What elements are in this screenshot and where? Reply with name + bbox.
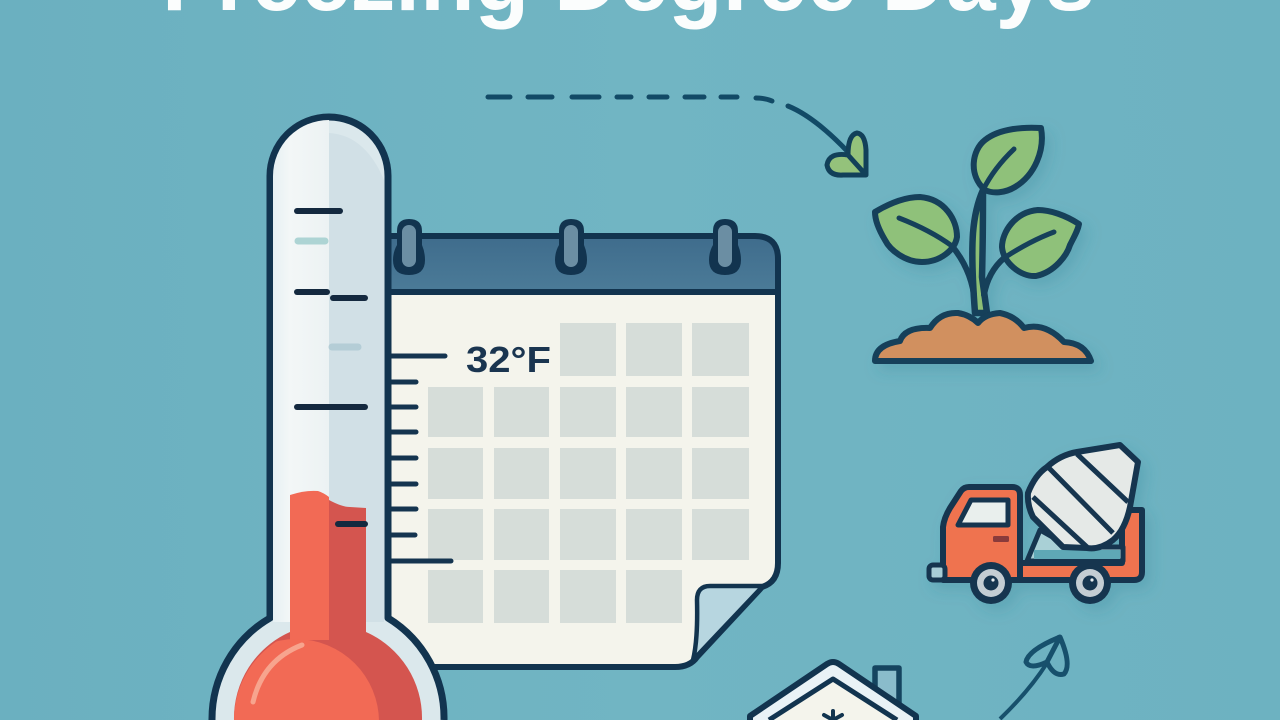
calendar rings (393, 219, 741, 275)
calendar page (388, 292, 778, 667)
top leaf vein (983, 149, 1014, 190)
icon: cement mixer truck (929, 445, 1142, 604)
mixer drum (1028, 445, 1138, 548)
arrow up to truck (1000, 637, 1067, 719)
dashed line (488, 97, 849, 153)
door handle (993, 536, 1009, 542)
snowflake (824, 711, 842, 720)
tube ticks (297, 211, 365, 524)
red liquid (213, 491, 422, 720)
arrow head (1026, 637, 1067, 674)
calendar (388, 219, 778, 667)
dark liquid (234, 495, 422, 720)
drum stripes (1033, 454, 1128, 547)
dashed arrow to plant (488, 97, 866, 175)
bulb front (234, 639, 379, 720)
stem branches (952, 246, 1004, 295)
ring slots (402, 225, 732, 267)
rear wheel (1069, 562, 1111, 604)
front wheel (970, 562, 1012, 604)
calendar day grid (428, 323, 749, 623)
right leaf vein (1004, 232, 1054, 258)
bulb highlight (253, 645, 302, 702)
calendar header (388, 236, 778, 292)
thermometer (212, 117, 444, 720)
page curl (693, 586, 763, 660)
mixer support (1027, 530, 1123, 561)
light liquid (290, 491, 329, 640)
scale ticks (390, 356, 451, 561)
faint ticks (298, 241, 358, 347)
arrow head (827, 133, 866, 175)
cab window (958, 500, 1008, 525)
chassis gap (1034, 550, 1120, 559)
icon: plant (875, 128, 1091, 361)
32°F label: 32°F (466, 339, 551, 380)
chimney (875, 668, 899, 705)
top leaf (974, 128, 1042, 192)
left leaf vein (899, 218, 952, 246)
right leaf (1002, 210, 1079, 276)
cab (943, 487, 1020, 580)
glass right shade (329, 133, 384, 622)
glass tube and bulb (212, 117, 444, 720)
icon: house (750, 662, 916, 720)
rear body (1020, 510, 1142, 580)
glass left highlight (273, 120, 329, 622)
arrow shaft (1000, 663, 1047, 719)
stem (972, 190, 987, 313)
bumper (929, 565, 945, 580)
infographic canvas (168, 0, 1150, 720)
soil mound (875, 313, 1091, 361)
left leaf (875, 197, 957, 262)
inner wall (769, 679, 897, 720)
outer roof (750, 662, 916, 720)
